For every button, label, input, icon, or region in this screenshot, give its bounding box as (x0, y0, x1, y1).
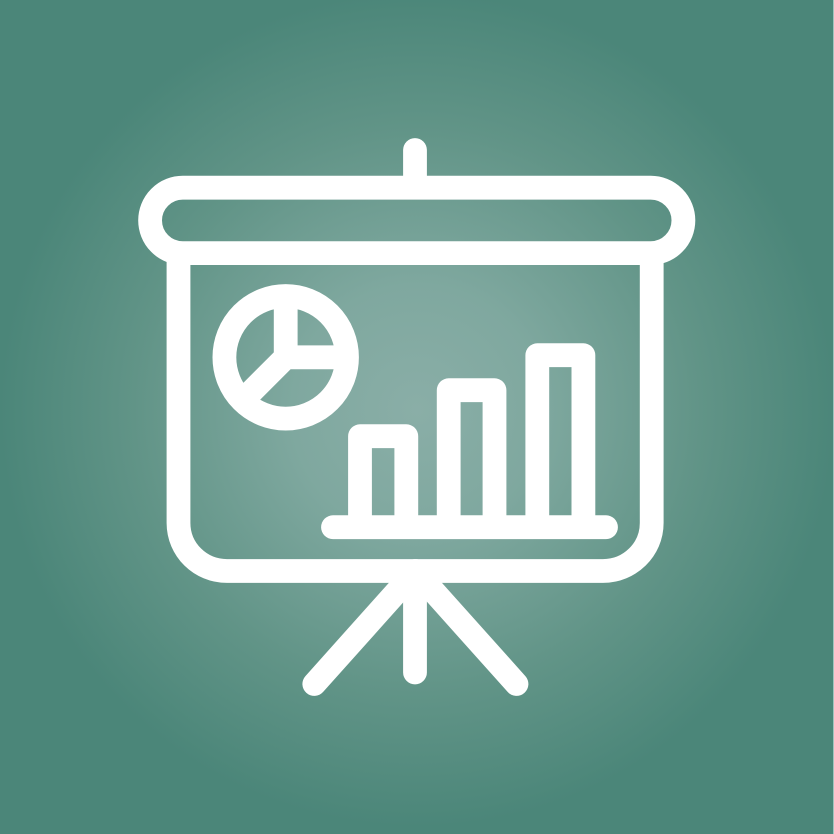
bar chart (333, 355, 606, 527)
icon: pie chart (224, 296, 347, 419)
tripod legs (314, 571, 516, 684)
right edge line (833, 0, 834, 834)
icon: projector screen (150, 150, 683, 684)
hanger (403, 150, 427, 180)
screen roller (150, 188, 683, 253)
baseline (333, 515, 606, 539)
screen body (178, 258, 652, 571)
